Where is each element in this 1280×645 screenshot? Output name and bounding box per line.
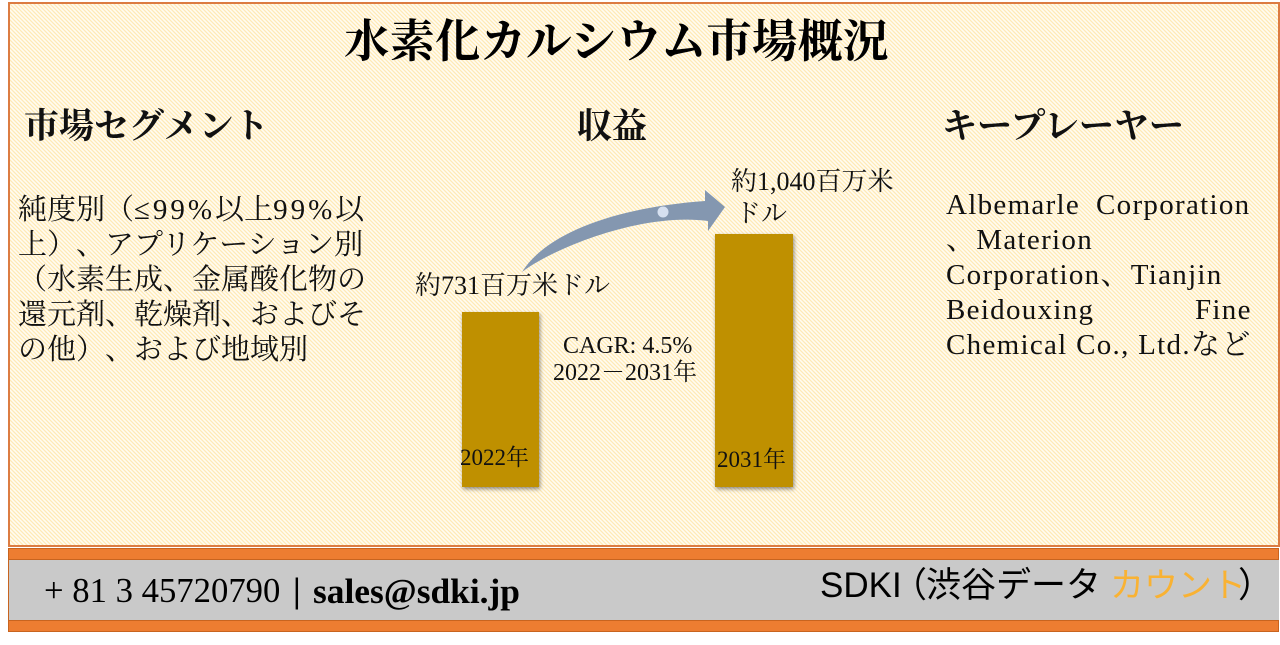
label: 2031 bar year: 2031年 <box>717 447 786 472</box>
text block: key players: Corporation、Tianjin <box>946 259 1223 291</box>
bar: 2031 <box>715 234 793 487</box>
text block: key players: 、Materion <box>946 224 1093 256</box>
footer gray strip <box>9 559 1279 621</box>
label: CAGR: 2022－2031年 <box>553 360 697 386</box>
text block: key players <box>946 189 1252 361</box>
footer brand: 渋谷データ <box>926 566 1101 605</box>
text block: key players: Albemarle <box>946 189 1080 221</box>
text block: segments: 純度別（≤99%以上99%以 <box>18 194 364 226</box>
footer brand: （ <box>892 566 927 605</box>
text block: key players: Fine <box>1195 294 1252 326</box>
footer contact <box>44 571 520 611</box>
footer brand <box>820 566 1273 605</box>
text block: key players: Beidouxing <box>946 294 1094 326</box>
footer band <box>8 548 1279 632</box>
bar: 2022 <box>462 312 539 487</box>
label: 2031 value: ドル <box>735 199 787 228</box>
label: 2022 value: 約731百万米ドル <box>415 271 610 300</box>
label: 2031 value: 約1,040百万米 <box>731 167 894 196</box>
text block: segments: の他）、および地域別 <box>18 334 308 366</box>
text block: segments <box>18 194 366 366</box>
footer contact: + 81 3 45720790 <box>44 571 280 610</box>
footer contact: | <box>293 571 301 610</box>
text block: segments: （水素生成、金属酸化物の <box>18 264 366 296</box>
footer contact: sales@sdki.jp <box>313 571 520 611</box>
text block: segments: 上）、アプリケーション別 <box>18 229 363 261</box>
footer brand: カウント <box>1110 567 1246 605</box>
title: 水素化カルシウム市場概況 <box>344 16 888 67</box>
label: 2031 value <box>731 167 894 228</box>
label: CAGR: CAGR: 4.5% <box>563 333 692 359</box>
heading: market segments: 市場セグメント <box>24 107 269 146</box>
heading: key players: キープレーヤー <box>942 107 1184 146</box>
text block: key players: Corporation <box>1096 189 1250 221</box>
text block: segments: 還元剤、乾燥剤、およびそ <box>18 299 366 331</box>
footer brand: SDKI <box>820 566 902 605</box>
label: CAGR <box>553 333 697 386</box>
arrow: growth curve <box>522 190 725 272</box>
heading: revenue: 収益 <box>577 107 647 146</box>
label: 2022 bar year: 2022年 <box>460 445 529 470</box>
footer brand: ） <box>1238 566 1273 605</box>
text block: key players: Chemical Co., Ltd.など <box>946 329 1252 361</box>
